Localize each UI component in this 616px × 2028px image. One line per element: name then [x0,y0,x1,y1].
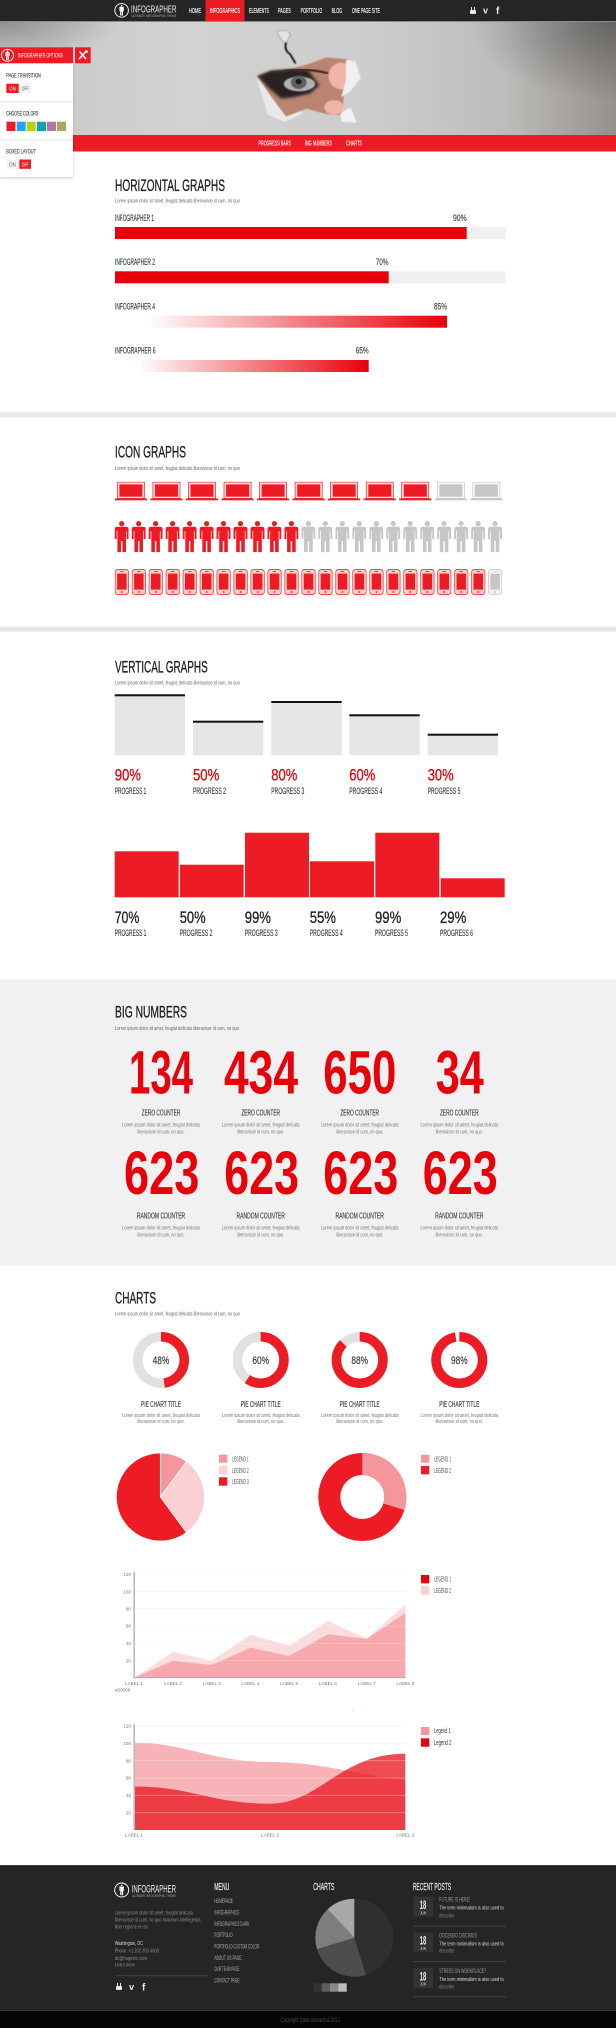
bar: infographer 1: 90% [453,213,467,224]
social icons [470,6,500,17]
active tab [206,0,244,21]
donut captions [122,1399,498,1425]
gray chart labels: PROGRESS 4 [349,786,382,797]
footer brand column: liber regione eu sit. [115,1925,149,1931]
red chart labels: PROGRESS 4 [310,928,343,939]
area chart: eight labels [115,1572,415,1692]
social icons: v [483,6,488,16]
boxed layout: BOXED LAYOUT [6,148,36,155]
red chart labels: PROGRESS 6 [440,928,473,939]
bar: infographer 1 [115,213,506,239]
random counters: 623 [124,1139,199,1207]
footer menu column [214,1882,260,1984]
panel: charts: LEGEND 2 [434,1468,451,1475]
heading: CHARTS [115,1288,156,1307]
laptop icon row [115,482,502,500]
area chart: eight labels: LABEL 3 [203,1681,221,1686]
area chart: eight labels: LABEL 1 [125,1681,143,1686]
area chart: eight labels: LABEL 4 [241,1681,260,1686]
footer brand column: dc@hugeinc.com [115,1956,147,1962]
bar: infographer 2: INFOGRAPHER 2 [115,257,155,268]
footer brand column: INFOGRAPHER [132,1883,176,1895]
area chart: eight labels: 20 [126,1658,131,1663]
gray chart values: 50% [193,767,220,785]
red chart labels: PROGRESS 2 [180,928,212,939]
panel: charts: LEGEND 3 [232,1479,249,1486]
footer menu column: ABOUT US PAGE [214,1956,242,1962]
menu items: BLOG [332,6,342,15]
random counters: 623 [224,1139,299,1207]
zero counters [122,1038,498,1136]
zero counters: ZERO COUNTER [241,1108,280,1118]
post 3: STRESS ON WORKPLACE? [439,1969,486,1975]
panel: infographer options [0,47,91,177]
logo: INFOGRAPHER [131,4,177,16]
post 1: FUTURE IS HERE! [439,1898,470,1904]
red chart values: 70% [115,909,140,927]
donut: 98% [436,1337,483,1383]
options header: INFOGRAPHER OPTIONS [18,53,63,60]
zero counters: Lorem ipsum dolor sit amet, feugiat delicata [222,1122,300,1128]
footer recent posts column: RECENT POSTS [413,1882,451,1893]
donut captions: PIE CHART TITLE [439,1399,479,1409]
curved area chart: LABEL 1 [125,1833,143,1838]
heading: ICON GRAPHS [115,442,186,461]
random counters: RANDOM COUNTER [237,1211,285,1221]
pie legend [219,1455,249,1486]
panel: charts: LEGEND 2 [232,1468,249,1475]
gray chart values [115,767,454,785]
footer menu column: INFOGRAPHICS DARK [214,1922,250,1928]
random counters: Lorem ipsum dolor sit amet, feugiat delicata [321,1225,399,1231]
zero counters: liberavisse id cum, no quo. [237,1130,284,1136]
footer pie [315,1899,393,1977]
heading: BIG NUMBERS [115,1002,187,1021]
gray chart values: 30% [428,767,454,785]
subheading: Lorem ipsum dolor sit amet, feugiat delicata liberavisse id cum, no quo [115,198,240,204]
footer menu column: OUR TEAM PAGE [214,1967,240,1973]
copyright bar [0,2011,616,2028]
footer brand column: v [129,1982,134,1992]
red sub navigation: CHARTS [346,141,362,148]
area chart: eight labels: 80 [126,1606,131,1611]
random counters: 623 [323,1139,398,1207]
copyright bar: Copyright Qode Interactive 2012 [281,2017,340,2024]
donut captions: PIE CHART TITLE [241,1399,281,1409]
boxed layout: OFF [22,162,29,168]
curved chart legend: Legend 2 [434,1740,451,1747]
bar: infographer 2 [115,257,506,283]
menu items: PORTFOLIO [301,6,322,15]
random counters: RANDOM COUNTER [435,1211,483,1221]
subheading: Lorem ipsum dolor sit amet, feugiat delicata liberavisse id cum, no quo. [115,1026,240,1032]
bar: infographer 6 [115,346,369,372]
post 1: 18 [420,1899,427,1912]
hero image: torn paper with eye [0,21,616,135]
post 1: JUN [420,1910,426,1916]
curved area chart: LABEL 3 [396,1833,415,1838]
zero counters: 134 [129,1038,193,1106]
footer menu column: INFOGRAPHICS [214,1910,239,1916]
footer chart column [313,1882,393,1992]
menu items: INFOGRAPHICS [210,6,240,15]
footer brand column: ULTIMATE INFOGRAPHIC THEME [132,1894,176,1898]
panel: charts: LEGEND 1 [434,1576,451,1584]
bar: infographer 2: 70% [376,257,389,268]
subheading: Lorem ipsum dolor sit amet, feugiat delicata liberavisse id cum, no quo [115,681,240,687]
area chart: eight labels: 120 [123,1572,131,1577]
gray chart values: 80% [271,767,298,785]
footer menu column: PORTFOLIO CUSTOM COLOR [214,1944,260,1950]
zero counters: 434 [224,1038,298,1106]
area chart: eight labels: LABEL 8 [396,1681,415,1686]
area chart: eight labels: 40 [126,1641,131,1646]
footer brand column: Phone: +1 202 350 4600 [115,1948,159,1954]
navigation bar [0,0,616,22]
doughnut legend [421,1455,451,1475]
zero counters: liberavisse id cum, no quo. [436,1130,483,1136]
area chart: eight labels: LABEL 2 [164,1681,182,1686]
page transition [6,73,41,93]
logo [115,4,177,18]
red chart labels: PROGRESS 1 [115,928,146,939]
red chart values: 55% [310,909,336,927]
footer menu column: CONTACT PAGE [214,1978,240,1984]
post 2: DOCENDO DISCIMUS [439,1933,477,1939]
panel: horizontal graphs [115,176,506,372]
donut: 60% [237,1337,284,1383]
panel: charts: LEGEND 2 [434,1588,451,1595]
random counters: Lorem ipsum dolor sit amet, feugiat delicata [122,1225,200,1231]
tool button [75,47,91,63]
zero counters: 650 [323,1038,396,1106]
post 3: JUN [420,1982,426,1988]
panel: icon graphs [115,442,502,595]
post 3: 18 [420,1970,427,1983]
red chart values: 29% [440,909,467,927]
zero counters: liberavisse id cum, no quo. [137,1130,185,1136]
menu items: PAGES [278,6,291,15]
curved area chart [123,1710,415,1838]
red column chart [115,833,505,897]
area chart: eight labels: LABEL 5 [280,1681,299,1686]
random counters [122,1139,498,1239]
gray chart labels [115,786,460,797]
curved area chart: LABEL 2 [261,1833,279,1838]
footer brand column: f [142,1982,146,1994]
bar: infographer 4: INFOGRAPHER 4 [115,302,155,312]
bar: infographer 6: INFOGRAPHER 6 [115,346,156,356]
footer menu column: HOMEPAGE [214,1899,233,1905]
random counters: liberavisse id cum, no quo. [137,1233,185,1239]
post 1: The term minimalism is also used to [439,1906,504,1912]
random counters: liberavisse id cum, no quo. [436,1233,483,1239]
logo: ULTIMATE INFOGRAPHIC THEME [132,14,177,18]
gray chart labels: PROGRESS 2 [193,786,226,797]
donut captions: Lorem ipsum dolor sit amet, feugiat delicata [420,1413,498,1419]
menu items: HOME [189,6,201,15]
pie chart [116,1453,204,1541]
subheading: Lorem ipsum dolor sit amet, feugiat delicata liberavisse id cum, no quo [115,466,240,472]
people icon row [115,521,502,552]
panel: big numbers [0,979,616,1266]
choose colors: CHOOSE COLORS [6,111,38,118]
post 1 [413,1897,506,1927]
heading: VERTICAL GRAPHS [115,657,208,676]
footer menu column: PORTFOLIO [214,1933,233,1939]
curved chart legend: Legend 1 [434,1728,451,1735]
donut: 60%: 60% [252,1355,269,1367]
area chart: eight labels: LABEL 7 [358,1681,376,1686]
post 1: describe [439,1913,454,1919]
subheading: Lorem ipsum dolor sit amet, feugiat delicata liberavisse id cum, no quo [115,1311,240,1317]
zero counters: Lorem ipsum dolor sit amet, feugiat delicata [122,1122,200,1128]
footer brand column: liberavisse id cum, no quo maiorum intellegebat, [115,1918,202,1924]
donut captions: PIE CHART TITLE [340,1399,380,1409]
donut: 48% [138,1337,184,1383]
boxed layout: ON [9,162,16,168]
random counters: Lorem ipsum dolor sit amet, feugiat delicata [420,1225,498,1231]
zero counters: Lorem ipsum dolor sit amet, feugiat delicata [321,1122,399,1128]
page transition: ON [9,86,16,92]
post 3: describe [439,1984,454,1990]
social icons: f [496,6,500,17]
area chart legend [421,1575,451,1595]
heading: HORIZONTAL GRAPHS [115,176,225,195]
footer chart column: CHARTS [313,1882,334,1893]
gray chart values: 60% [349,767,376,785]
donut captions: Lorem ipsum dolor sit amet, feugiat delicata [321,1413,399,1419]
random counters: Lorem ipsum dolor sit amet, feugiat delicata [222,1225,300,1231]
donut captions: PIE CHART TITLE [141,1399,181,1409]
area chart: eight labels: a50009 [115,1688,131,1692]
red chart values: 99% [245,909,271,927]
donut captions: liberavisse id cum, no quo. [336,1419,383,1425]
zero counters: ZERO COUNTER [440,1108,479,1118]
gray chart labels: PROGRESS 3 [271,786,304,797]
curved area chart: 60 [126,1776,131,1781]
panel: charts [115,1288,498,1838]
donut captions: Lorem ipsum dolor sit amet, feugiat delicata [122,1413,200,1419]
red sub navigation [0,135,616,152]
bar: infographer 4: 85% [434,302,447,312]
donut captions: Lorem ipsum dolor sit amet, feugiat delicata [222,1413,300,1419]
footer brand column: Lorem ipsum dolor sit amet, feugiat delicata [115,1910,193,1916]
page transition: PAGE TRANSITION [6,73,41,80]
gray chart labels: PROGRESS 1 [115,786,146,797]
area chart: eight labels: 100 [123,1589,131,1594]
random counters: liberavisse id cum, no quo. [336,1233,383,1239]
footer brand column: Learn more [115,1962,135,1968]
red chart labels [115,928,473,939]
curved area chart: 40 [126,1793,131,1798]
red sub navigation: BIG NUMBERS [305,141,332,148]
footer brand column [115,1883,208,1994]
zero counters: liberavisse id cum, no quo. [336,1130,383,1136]
red chart values [115,909,467,927]
menu items [189,6,380,15]
red chart labels: PROGRESS 3 [245,928,278,939]
red chart values: 50% [180,909,206,927]
footer brand column: Washington, DC [115,1941,143,1947]
area chart: eight labels: 60 [126,1624,131,1629]
curved area chart: 100 [123,1741,131,1746]
boxed layout [6,148,36,169]
post 2 [413,1932,506,1962]
footer pie legend [313,1983,347,1992]
donut: 98%: 98% [451,1355,468,1367]
panel: charts: LEGEND 1 [232,1456,249,1464]
bar: infographer 1: INFOGRAPHER 1 [115,213,154,224]
zero counters: Lorem ipsum dolor sit amet, feugiat delicata [420,1122,498,1128]
donut captions: liberavisse id cum, no quo. [137,1419,185,1425]
donut captions: liberavisse id cum, no quo. [436,1419,483,1425]
footer [0,1865,616,2011]
post 3: The term minimalism is also used to [439,1977,504,1983]
post 2: The term minimalism is also used to [439,1941,504,1947]
random counters: 623 [423,1139,498,1207]
curved chart legend [421,1727,451,1747]
curved area chart: 20 [126,1810,131,1815]
random counters: RANDOM COUNTER [336,1211,384,1221]
phone icon row [115,569,502,595]
curved area chart: 80 [126,1758,131,1763]
post 2: describe [439,1948,454,1954]
menu items: ELEMENTS [249,6,269,15]
red sub navigation: PROGRESS BARS [258,141,291,148]
zero counters: ZERO COUNTER [142,1108,180,1118]
footer recent posts column [413,1882,506,1997]
gray chart labels: PROGRESS 5 [428,786,460,797]
panel: charts: LEGEND 1 [434,1456,451,1464]
random counters: RANDOM COUNTER [137,1211,185,1221]
red chart labels: PROGRESS 5 [375,928,408,939]
bar: infographer 4 [115,302,447,328]
doughnut chart [329,1464,395,1530]
post 2: JUN [420,1946,426,1952]
post 3 [413,1968,506,1997]
navigation bar: ONE PAGE SITE [352,6,380,15]
gray chart values: 90% [115,767,141,785]
curved area chart: 120 [123,1724,131,1729]
footer menu column: MENU [214,1882,229,1893]
donut: 48%: 48% [153,1355,170,1367]
page transition: OFF [22,86,29,92]
zero counters: 34 [436,1038,484,1106]
zero counters: ZERO COUNTER [340,1108,379,1118]
donut: 88% [336,1337,383,1383]
donut: 88%: 88% [351,1355,368,1367]
post 2: 18 [420,1935,427,1948]
donut captions: liberavisse id cum, no quo. [237,1419,284,1425]
random counters: liberavisse id cum, no quo. [237,1233,284,1239]
gray column chart [115,694,498,755]
area chart: eight labels: LABEL 6 [319,1681,337,1686]
panel: vertical graphs [115,657,505,939]
bar: infographer 6: 65% [356,346,369,356]
red chart values: 99% [375,909,402,927]
